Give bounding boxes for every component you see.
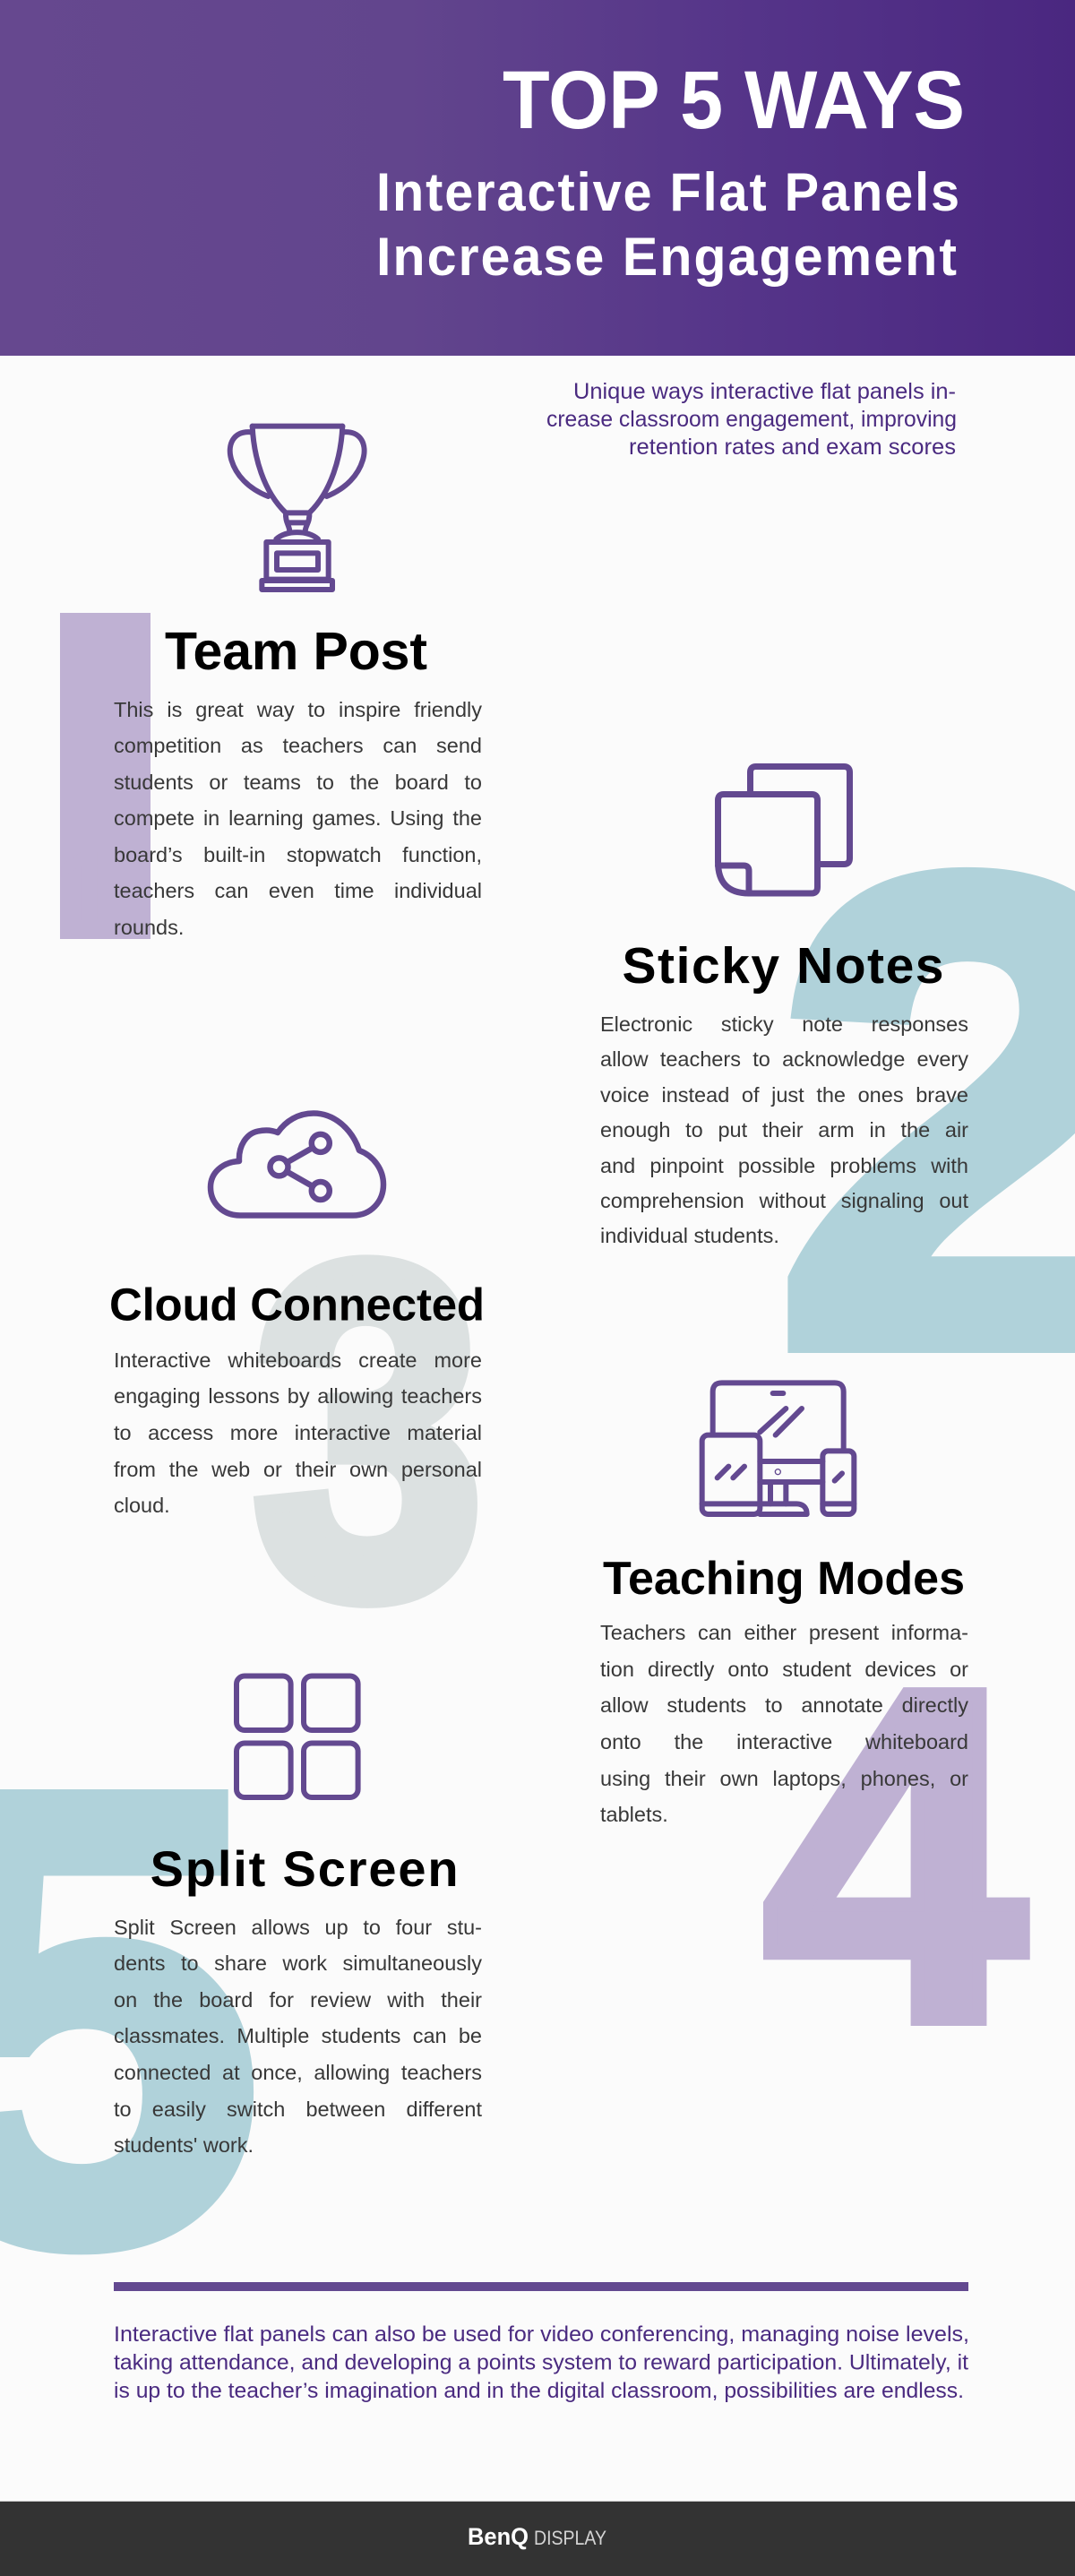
numeral 3: 3 [254,1167,484,1693]
body text: board’s built-in stopwatch function, [114,843,482,866]
panel: 3 Cloud Connected [109,1110,485,1693]
logo: BenQ Display [468,2523,606,2550]
icon: cloud share [211,1113,383,1215]
body text: connected at once, allowing teachers [114,2061,482,2084]
logo: BenQ Display: BenQ [468,2523,529,2550]
closing text: is up to the teacher’s imagination and in the digital classroom, possibilities are endless. [114,2379,964,2403]
intro text [546,379,957,460]
closing text: taking attendance, and developing a points system to reward participation. Ultimately, it [114,2351,968,2374]
logo: BenQ Display: DISPLAY [534,2527,606,2549]
body text: voice instead of just the ones brave [600,1083,968,1107]
body text [600,1012,968,1247]
body text: This is great way to inspire friendly [114,698,482,721]
subtitle: Increase Engagement [376,227,959,287]
body text [114,698,482,939]
body text: individual students. [600,1224,779,1247]
icon: sticky notes [718,767,849,893]
footer bar [0,2501,1075,2576]
panel: 5 Split Screen [0,1663,482,2373]
body text: classmates. Multiple students can be [114,2024,482,2047]
numeral 1 [54,613,150,957]
panel: 1 Team Post [54,423,482,957]
body text [600,1621,968,1826]
body text: cloud. [114,1494,170,1517]
body text: and pinpoint possible problems with [600,1154,968,1177]
body text: to easily switch between different [114,2098,482,2121]
body text: allow teachers to acknowledge every [600,1047,968,1071]
body text: enough to put their arm in the air [600,1118,968,1142]
body text: engaging lessons by allowing teachers [114,1384,482,1408]
heading: Split Screen [150,1840,459,1897]
panel: 4 Teaching Modes [600,1380,1030,2119]
body text: dents to share work simultaneously [114,1951,482,1975]
icon: four-pane grid [236,1676,358,1797]
subtitle [376,162,961,287]
body text: Electronic sticky note responses [600,1012,968,1036]
body text: rounds. [114,916,184,939]
panel: 2 Sticky Notes [600,741,1075,1484]
heading: Teaching Modes [603,1553,965,1605]
body text: on the board for review with their [114,1988,482,2012]
body text: Interactive whiteboards create more [114,1348,482,1372]
numeral 4: 4 [763,1593,1028,2119]
heading: Sticky Notes [622,937,944,995]
body text: tablets. [600,1803,668,1826]
body text: compete in learning games. Using the [114,806,482,830]
closing divider bar [114,2282,968,2291]
body text: competition as teachers can send [114,734,482,757]
heading: Team Post [165,622,427,681]
intro text: Unique ways interactive flat panels in- [573,379,956,404]
body text: to access more interactive material [114,1421,482,1444]
closing text [114,2322,969,2403]
body text [114,1916,482,2157]
intro text: retention rates and exam scores [629,435,956,460]
body text: tion directly onto student devices or [600,1658,968,1681]
numeral 1: 1 [54,826,118,957]
body text: students or teams to the board to [114,771,482,794]
title: TOP 5 WAYS [503,55,965,146]
body text: using their own laptops, phones, or [600,1767,968,1790]
subtitle: Interactive Flat Panels [376,162,961,222]
icon: trophy [230,426,365,590]
body text: Teachers can either present informa- [600,1621,968,1644]
body text [114,1348,482,1517]
header banner [0,0,1075,356]
closing text: Interactive flat panels can also be used for video conferencing, managing noise levels, [114,2322,969,2347]
body text: Split Screen allows up to four stu- [114,1916,482,1939]
body text: teachers can even time individual [114,879,482,902]
body text: allow students to annotate directly [600,1693,968,1717]
intro text: crease classroom engagement, improving [546,407,957,432]
body text: from the web or their own personal [114,1458,482,1481]
body text: comprehension without signaling out [600,1189,968,1212]
body text: onto the interactive whiteboard [600,1730,968,1753]
body text: students' work. [114,2133,254,2157]
icon: devices [702,1383,854,1514]
heading: Cloud Connected [109,1279,485,1330]
